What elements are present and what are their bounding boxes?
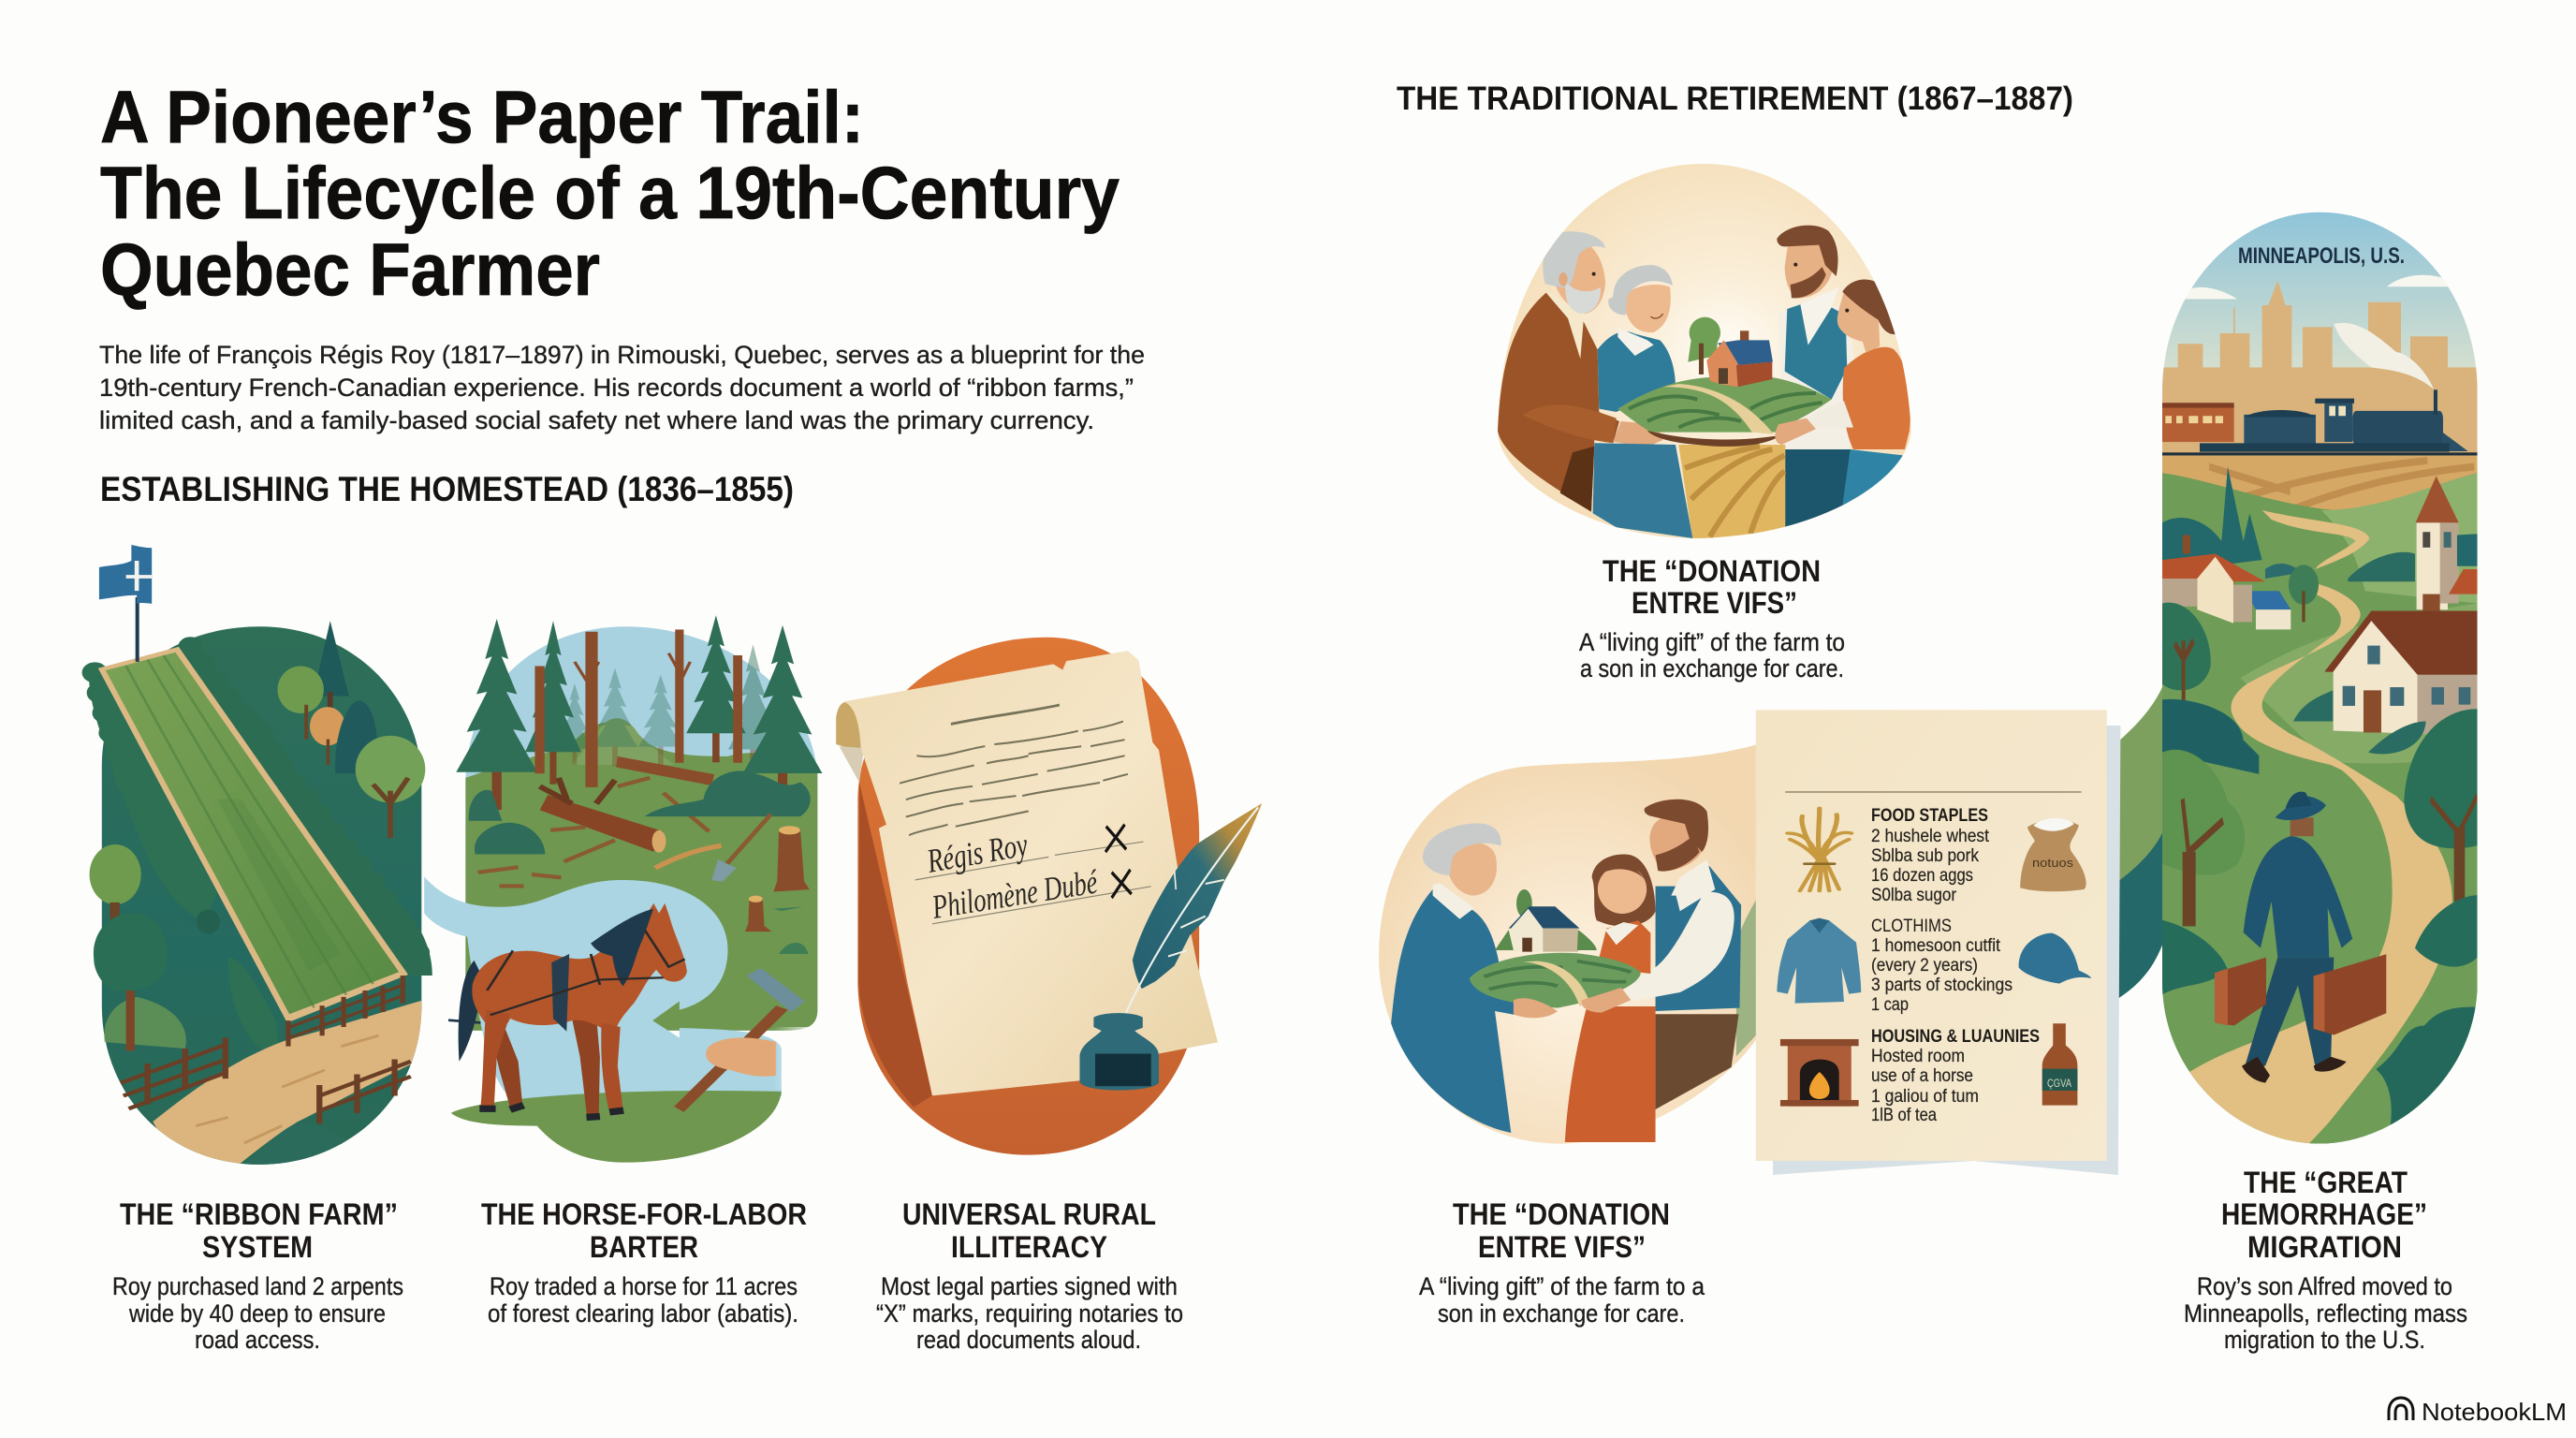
forest sky and ground bbox=[465, 626, 817, 1031]
caption: horse barter bbox=[481, 1197, 807, 1328]
caption: horse barter: of forest clearing labor (abatis). bbox=[488, 1299, 798, 1328]
field furrows bbox=[126, 655, 373, 1007]
mane bbox=[591, 909, 653, 986]
intro paragraph bbox=[99, 341, 1145, 434]
meadow bbox=[2162, 473, 2478, 1144]
far legs bbox=[491, 1014, 600, 1117]
foreground trees bbox=[2162, 709, 2478, 1144]
clouds bbox=[2178, 275, 2462, 299]
body bbox=[472, 913, 666, 1035]
panel: maintenance contract document bbox=[1756, 710, 2120, 1175]
caption: donation bottom: son in exchange for care. bbox=[1438, 1299, 1685, 1328]
panel: ribbon farm illustration bbox=[88, 545, 432, 1168]
document text: food staples bbox=[1871, 806, 1990, 905]
document text: clothing: 3 parts of stockings bbox=[1871, 976, 2012, 995]
girl bbox=[1565, 854, 1656, 1142]
signature: Régis Roy: Régis Roy bbox=[924, 826, 1031, 880]
icon: hammer in hand bbox=[674, 968, 822, 1112]
old woman bbox=[1593, 265, 1692, 538]
barter swoosh bbox=[424, 876, 782, 1100]
label: Minneapolis: MINNEAPOLIS, U.S. bbox=[2238, 243, 2405, 269]
NotebookLM watermark: NotebookLM bbox=[2422, 1398, 2567, 1426]
bottle label: ÇGVA bbox=[2047, 1077, 2071, 1090]
document text: housing and luxuries: use of a horse bbox=[1871, 1066, 1973, 1086]
caption: ribbon farm bbox=[112, 1197, 403, 1354]
document text: clothing: CLOTHIMS bbox=[1871, 917, 1952, 936]
caption: horse barter: BARTER bbox=[590, 1230, 698, 1264]
handwritten lines bbox=[900, 705, 1128, 835]
hooves bbox=[479, 1106, 623, 1117]
farmhouse and tower bbox=[2293, 477, 2478, 754]
document sheet bbox=[1756, 710, 2107, 1161]
document text: clothing: (every 2 years) bbox=[1871, 956, 1978, 976]
orange backing shape bbox=[857, 638, 1199, 1155]
caption: ribbon farm: wide by 40 deep to ensure bbox=[128, 1299, 386, 1328]
icon: wheat sheaf bbox=[1788, 808, 1852, 891]
right hedge bbox=[177, 639, 432, 976]
caption: great hemorrhage: THE “GREAT bbox=[2244, 1166, 2408, 1199]
icon: horse bbox=[448, 903, 687, 1117]
title: A Pioneer’s Paper Trail: bbox=[100, 75, 864, 158]
icon: rum bottle bbox=[2042, 1023, 2077, 1106]
caption: donation bottom: ENTRE VIFS” bbox=[1478, 1230, 1646, 1264]
caption: illiteracy: ILLITERACY bbox=[951, 1230, 1107, 1264]
caption: illiteracy: “X” marks, requiring notaries to bbox=[876, 1299, 1183, 1328]
caption: donation top bbox=[1579, 554, 1845, 682]
caption: great hemorrhage: Minneapolls, reflecting mass bbox=[2184, 1299, 2467, 1328]
bushes bbox=[469, 770, 811, 855]
green backdrop strip bbox=[1736, 896, 1758, 1056]
icon: ink bottle bbox=[1079, 1013, 1159, 1091]
signature: Philomène Dubé: Philomène Dubé bbox=[929, 862, 1102, 926]
background trees bbox=[90, 621, 425, 1050]
title bbox=[100, 75, 1120, 311]
parchment bbox=[836, 702, 861, 752]
section heading: homestead: ESTABLISHING THE HOMESTEAD (1836–1855) bbox=[100, 470, 794, 508]
document text: housing and luxuries bbox=[1871, 1027, 2040, 1125]
icon: cap bbox=[2019, 933, 2091, 984]
panel: family handing farm to next generation bbox=[1498, 164, 1911, 540]
caption: great hemorrhage bbox=[2184, 1166, 2467, 1354]
man bbox=[1624, 800, 1741, 1109]
steam bbox=[2334, 323, 2434, 389]
golden field cloth bbox=[1678, 445, 1785, 540]
document text: food staples: 16 dozen aggs bbox=[1871, 866, 1973, 886]
near legs bbox=[480, 1010, 623, 1112]
intro paragraph: The life of François Régis Roy (1817–1897) in Rimouski, Quebec, serves as a blueprint for the bbox=[99, 341, 1145, 369]
caption: illiteracy bbox=[876, 1197, 1183, 1354]
harness bbox=[551, 954, 569, 1032]
document text: food staples: Sblba sub pork bbox=[1871, 846, 1979, 866]
panel: forest clearing and horse barter illustration bbox=[424, 615, 822, 1163]
fences bbox=[121, 976, 411, 1123]
felled logs bbox=[478, 756, 714, 886]
caption: ribbon farm: road access. bbox=[195, 1326, 320, 1354]
document shadow bbox=[1773, 726, 2120, 1175]
caption: illiteracy: read documents aloud. bbox=[916, 1326, 1141, 1354]
peach backdrop bbox=[1379, 744, 1758, 1144]
signature rulings bbox=[915, 842, 1151, 924]
left hedge bbox=[88, 663, 279, 1057]
younger man bbox=[1777, 226, 1860, 532]
icon: shirt bbox=[1777, 920, 1861, 1004]
title: Quebec Farmer bbox=[100, 227, 600, 311]
section heading: retirement: THE TRADITIONAL RETIREMENT (1867–1887) bbox=[1397, 81, 2073, 117]
harvested field bbox=[2162, 455, 2477, 510]
caption: horse barter: Roy traded a horse for 11 acres bbox=[490, 1272, 798, 1300]
old man bbox=[1498, 231, 1663, 512]
caption: donation top: ENTRE VIFS” bbox=[1632, 586, 1797, 620]
caption: ribbon farm: SYSTEM bbox=[202, 1230, 313, 1264]
document text: clothing: 1 homesoon cutfit bbox=[1871, 936, 2001, 956]
miniature farm on platter bbox=[1617, 317, 1832, 447]
walking man bbox=[2242, 792, 2352, 1083]
document text: food staples: S0lba sugor bbox=[1871, 886, 1957, 905]
document text: housing and luxuries: Hosted room bbox=[1871, 1047, 1965, 1066]
document text: food staples: FOOD STAPLES bbox=[1871, 806, 1988, 826]
suitcases bbox=[2215, 954, 2386, 1035]
document text: clothing bbox=[1871, 917, 2012, 1015]
connector ribbon to migration panel bbox=[2090, 687, 2162, 1013]
document text: food staples: 2 hushele whest bbox=[1871, 827, 1990, 846]
icon: flour sack bbox=[2020, 820, 2086, 891]
miniature farm bbox=[1470, 889, 1641, 1018]
panel: second family handing farm bbox=[1379, 744, 1758, 1144]
caption: great hemorrhage: Roy’s son Alfred moved to bbox=[2197, 1272, 2452, 1300]
caption: illiteracy: UNIVERSAL RURAL bbox=[902, 1197, 1156, 1231]
document text: housing and luxuries: HOUSING & LUAUNIES bbox=[1871, 1027, 2040, 1047]
winding path bbox=[2184, 510, 2452, 1150]
caption: ribbon farm: Roy purchased land 2 arpents bbox=[112, 1272, 403, 1300]
caption: donation bottom: THE “DONATION bbox=[1453, 1197, 1670, 1231]
intro paragraph: limited cash, and a family-based social safety net where land was the primary currency. bbox=[99, 406, 1094, 434]
far trees and village bbox=[2162, 467, 2415, 774]
sky bbox=[2162, 206, 2478, 392]
head bbox=[645, 903, 687, 982]
icon: flag on pole bbox=[99, 545, 152, 662]
caption: donation bottom bbox=[1419, 1197, 1705, 1328]
rail line bbox=[2162, 452, 2478, 456]
green hill bbox=[451, 1091, 782, 1163]
icon: fireplace bbox=[1788, 1046, 1852, 1107]
trees bbox=[456, 615, 822, 810]
younger woman bbox=[1837, 279, 1910, 506]
caption: great hemorrhage: HEMORRHAGE” bbox=[2221, 1197, 2427, 1231]
field strip bbox=[98, 647, 408, 1022]
sack label: notuos bbox=[2032, 856, 2074, 870]
road bbox=[153, 999, 427, 1168]
title: The Lifecycle of a 19th-Century bbox=[100, 151, 1120, 234]
caption: donation top: THE “DONATION bbox=[1603, 554, 1821, 588]
panel: migration to Minneapolis bbox=[2162, 206, 2478, 1150]
document text: housing and luxuries: 1lB of tea bbox=[1871, 1106, 1937, 1125]
caption: donation top: A “living gift” of the farm to bbox=[1579, 628, 1845, 656]
document text: clothing: 1 cap bbox=[1871, 995, 1909, 1015]
stumps and shovel bbox=[655, 814, 810, 954]
caption: donation bottom: A “living gift” of the farm to a bbox=[1419, 1272, 1705, 1300]
panel: illiterate signatures document illustration bbox=[836, 638, 1262, 1155]
caption: horse barter: THE HORSE-FOR-LABOR bbox=[481, 1197, 807, 1231]
hands bbox=[1775, 418, 1816, 445]
caption: great hemorrhage: migration to the U.S. bbox=[2224, 1326, 2425, 1354]
document text: housing and luxuries: 1 galiou of tum bbox=[1871, 1087, 1979, 1107]
x marks bbox=[1105, 825, 1132, 898]
caption: donation top: a son in exchange for care. bbox=[1580, 654, 1844, 682]
circular backdrop bbox=[1498, 164, 1911, 538]
caption: great hemorrhage: MIGRATION bbox=[2247, 1230, 2402, 1264]
old woman with farm bbox=[1391, 823, 1553, 1133]
caption: ribbon farm: THE “RIBBON FARM” bbox=[120, 1197, 398, 1231]
divider bbox=[1785, 791, 2082, 793]
pill background bbox=[102, 626, 421, 1165]
intro paragraph: 19th-century French-Canadian experience. His records document a world of “ribbon farms,” bbox=[99, 374, 1134, 402]
skyline bbox=[2162, 281, 2478, 454]
train bbox=[2162, 389, 2468, 452]
tail bbox=[459, 961, 482, 1062]
icon: quill bbox=[1125, 803, 1262, 1016]
caption: illiteracy: Most legal parties signed with bbox=[881, 1272, 1178, 1300]
